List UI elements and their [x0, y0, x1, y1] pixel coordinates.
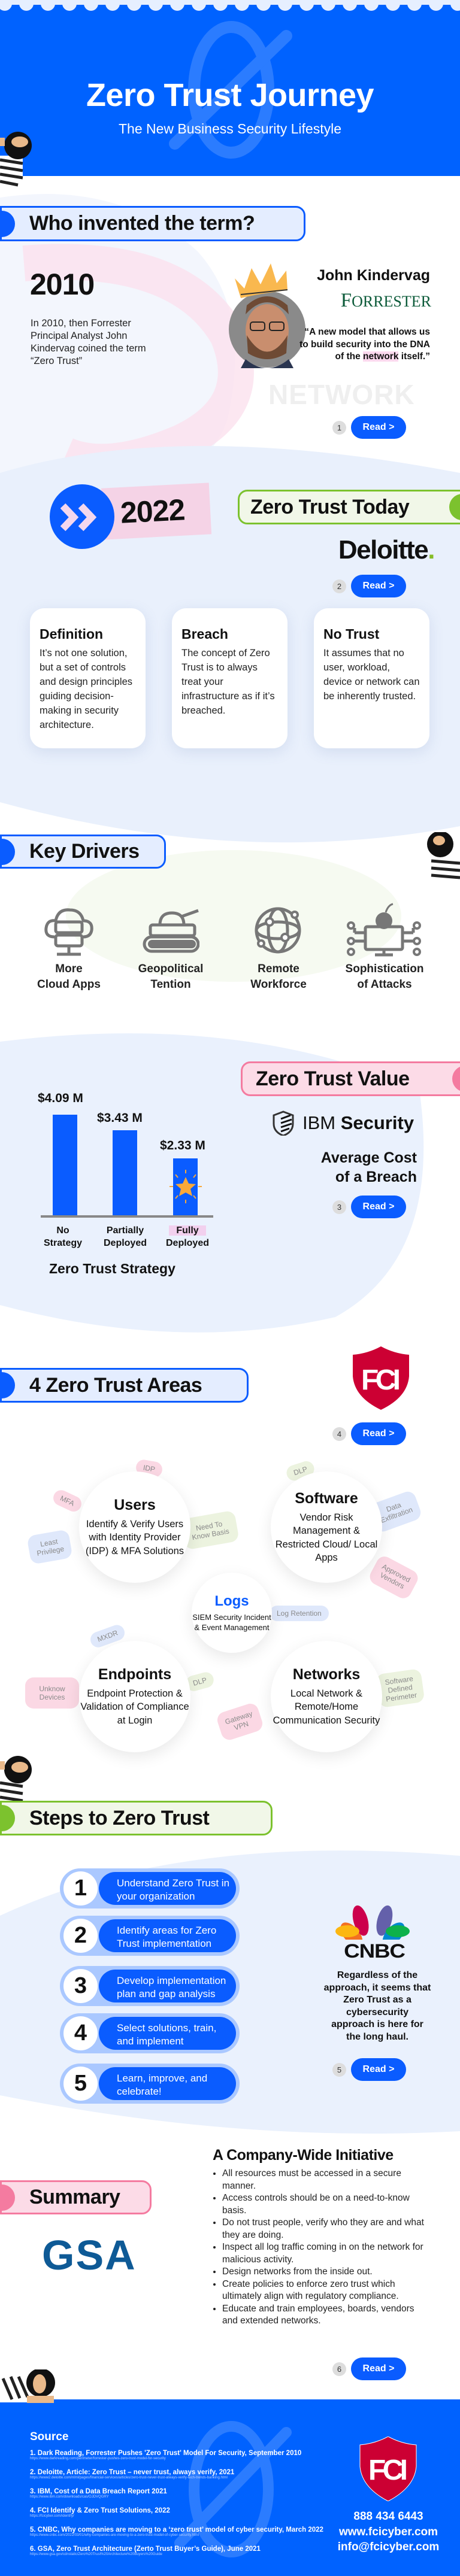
circle: networks [271, 1641, 382, 1752]
step 4: 4 [74, 2020, 87, 2046]
driver labels [37, 963, 101, 991]
icon: cloud apps [44, 908, 93, 955]
zero trust areas diagram: Software [385, 1674, 414, 1686]
circle: endpoints: Endpoints [98, 1666, 171, 1683]
card: definition: Definition [40, 626, 103, 642]
contact [338, 2510, 439, 2553]
icon: bomb computer [347, 903, 421, 957]
read 4: 4 [337, 1430, 341, 1438]
read 4 [332, 1422, 406, 1445]
text: average cost: of a Breach [335, 1169, 417, 1185]
card: no trust: It assumes that no user, workload, device or network can be inherently trusted. [323, 648, 419, 702]
zero trust areas diagram [25, 1460, 424, 1759]
chart title: Zero Trust Strategy [49, 1261, 175, 1276]
zero trust areas diagram: MXDR [96, 1628, 119, 1644]
heading: 4 zero trust areas [0, 1368, 249, 1403]
subtitle: The New Business Security Lifestyle [119, 121, 341, 136]
read 2 [332, 575, 406, 597]
zero trust areas diagram: DLP [192, 1676, 208, 1688]
driver labels: More [55, 963, 83, 975]
step 4 [60, 2013, 240, 2053]
heading: who invented: Who invented the term? [29, 212, 255, 235]
bar chart [38, 1091, 213, 1248]
text: company-wide initiative: Educate and train employees, boards, vendors and extended networks. [222, 2304, 414, 2326]
read 5 [332, 2058, 406, 2081]
bar chart: $2.33 M [160, 1139, 205, 1152]
read 3 [332, 1196, 406, 1218]
contact: www.fcicyber.com [339, 2525, 438, 2538]
sources: 3. IBM, Cost of a Data Breach Report 2021 [30, 2488, 167, 2495]
tags: IDP [143, 1463, 156, 1474]
photo: John Kindervag with crown [229, 263, 305, 368]
circle: logs [192, 1573, 272, 1653]
sources: 4. FCI Identify & Zero Trust Solutions, 2022 [30, 2507, 170, 2514]
text: 2010 paragraph: In 2010, then Forrester Principal Analyst John Kindervag coined the term “Zero Trust” [31, 318, 146, 366]
heading: steps to zero trust [0, 1801, 273, 1835]
read 5: 5 [337, 2065, 341, 2074]
step 1: Understand Zero Trust in your organization [117, 1877, 229, 1901]
zero trust areas diagram: DLP [292, 1465, 308, 1477]
zero trust areas diagram: Exfiltration [379, 1505, 414, 1525]
step 2 [60, 1916, 240, 1956]
card: no trust: No Trust [323, 626, 379, 642]
read 5: Read > [363, 2064, 394, 2074]
heading: key drivers: Key Drivers [29, 840, 140, 863]
zero trust areas diagram: MFA [59, 1494, 75, 1508]
read 6: Read > [363, 2363, 394, 2374]
year 2022 badge: 2022 [120, 493, 186, 530]
step 2: Identify areas for Zero Trust implementation [117, 1924, 216, 1949]
zero trust areas diagram: Gateway [224, 1709, 253, 1726]
step 1 [60, 1868, 240, 1909]
icon: globe network [255, 908, 301, 953]
logo: Deloitte: Deloitte. [338, 535, 434, 565]
year 2022 badge [50, 483, 211, 549]
step 3: Develop implementation plan and gap analysis [117, 1974, 226, 1999]
name: John Kindervag [317, 267, 430, 284]
text: cnbc quote: Regardless of the approach, it seems that Zero Trust as a cybersecurity approach is here for the long haul. [324, 1970, 431, 2041]
logo: IBM Security [273, 1110, 414, 1136]
logo: Forrester: FORRESTER [341, 290, 431, 311]
text: company-wide initiative: Create policies to enforce zero trust which ultimately align with regulatory compliance. [222, 2278, 399, 2301]
text: Tention [150, 978, 191, 991]
icon: thief 1 [0, 132, 32, 187]
read 3: 3 [337, 1202, 341, 1212]
zero trust areas diagram: VPN [233, 1719, 250, 1732]
heading: zero trust today [238, 490, 460, 524]
circle: endpoints: Endpoint Protection & Validation of Compliance at Login [80, 1688, 189, 1726]
zero trust areas diagram: Log Retention [277, 1609, 322, 1618]
bar chart: Strategy [44, 1238, 82, 1248]
text: company-wide initiative: Do not trust people, verify who they are and what they are doing. [222, 2217, 424, 2240]
icon: tank [143, 909, 199, 953]
circle: networks: Networks [293, 1666, 360, 1683]
icon: thief 4 [0, 2369, 55, 2403]
sources: 5. CNBC, Why companies are moving to a ‘zero trust’ model of cyber security, March 2022 [30, 2526, 323, 2533]
zero trust areas diagram: Need To [195, 1519, 223, 1533]
heading: zero trust today: Zero Trust Today [250, 496, 409, 518]
zero trust areas diagram: Know Basis [191, 1527, 230, 1542]
zero trust areas diagram: Data [385, 1501, 402, 1513]
text: Sophistication [346, 963, 423, 975]
read 2: Read > [363, 581, 394, 591]
zero trust areas diagram: Vendors [379, 1571, 406, 1591]
logo: CNBC [335, 1905, 410, 1962]
circle: users [79, 1471, 190, 1583]
read 3: Read > [363, 1201, 394, 1212]
zero trust areas diagram: Devices [40, 1693, 65, 1701]
sources: 6. GSA, Zero Trust Architecture (Zerto Trust Buyer’s Guide), June 2021 [30, 2545, 261, 2553]
bar chart: Deployed [104, 1238, 147, 1248]
icon: thief 3 [0, 1756, 32, 1801]
step 5 [60, 2064, 240, 2104]
card: breach: Breach [181, 626, 228, 642]
contact: 888 434 6443 [353, 2510, 423, 2523]
quote: “A new model that allows us to build security into the DNA of the network itself.” [299, 327, 430, 362]
read 6: 6 [337, 2365, 341, 2373]
step 4: Select solutions, train, and implement [117, 2022, 216, 2046]
NETWORK watermark: NETWORK [268, 379, 415, 410]
sources [30, 2431, 323, 2556]
sources: https://www.gsa.gov/cdnstatic/Zero%20Trust%20Architecture%20Buyers%20Guide [30, 2553, 162, 2556]
driver labels: Cloud Apps [37, 978, 101, 991]
step 5: Learn, improve, and celebrate! [117, 2073, 207, 2096]
logo: IBM Security: IBM Security [302, 1112, 414, 1133]
read 1: Read > [363, 422, 394, 432]
step 3 [60, 1966, 240, 2006]
step 1: 1 [74, 1876, 87, 1901]
circle: software: Software [295, 1489, 358, 1506]
card: breach [172, 608, 288, 748]
tags [135, 1458, 164, 1479]
contact: info@fcicyber.com [338, 2541, 439, 2553]
text: company-wide initiative: Inspect all log traffic coming in on the network for malicious activity. [222, 2242, 423, 2264]
text: company-wide initiative: Access controls should be on a need-to-know basis. [222, 2193, 410, 2215]
read 1: 1 [337, 423, 341, 432]
logo: FCI footer [359, 2437, 417, 2501]
bar chart: Fully [176, 1225, 199, 1236]
sources: 2. Deloitte, Article: Zero Trust – never trust, always verify, 2021 [30, 2469, 234, 2476]
circle: logs: Logs [214, 1593, 249, 1609]
sources: https://www2.deloitte.com/nl/nl/pages/financial-services/articles/zero-trust-never-trust-always-verify-tech-trends-banking.html [30, 2476, 228, 2480]
bar chart: $3.43 M [97, 1111, 143, 1125]
circle: users: Identify & Verify Users with Identity Provider (IDP) & MFA Solutions [86, 1519, 184, 1556]
sources: https://www.darkreading.com/perimeter/forrester-pushes-zero-trust-model-for-security [30, 2457, 166, 2460]
zero trust areas diagram: Least [40, 1537, 58, 1549]
text: company-wide initiative [213, 2147, 424, 2326]
sources: 1. Dark Reading, Forrester Pushes 'Zero Trust' Model For Security, September 2010 [30, 2450, 301, 2457]
zero trust areas diagram: Approved [380, 1562, 411, 1584]
bar chart: $4.09 M [38, 1091, 83, 1105]
text: of Attacks [357, 978, 412, 991]
heading: summary [0, 2180, 152, 2214]
zero trust areas diagram: Perimeter [385, 1691, 417, 1703]
step 3: 3 [74, 1973, 87, 1998]
text: average cost [321, 1149, 417, 1185]
text: company-wide initiative: All resources must be accessed in a secure manner. [222, 2168, 401, 2191]
sources: Source [30, 2431, 68, 2443]
circle: endpoints [79, 1641, 190, 1752]
text: company-wide initiative: A Company-Wide Initiative [213, 2147, 394, 2164]
card: breach: The concept of Zero Trust is to always treat your infrastructure as if it’s breached. [181, 648, 275, 716]
heading: summary: Summary [29, 2186, 120, 2208]
circle: users: Users [114, 1497, 156, 1513]
header [0, 0, 460, 176]
zero trust areas diagram: Defined [388, 1683, 413, 1695]
heading: 4 zero trust areas: 4 Zero Trust Areas [29, 1373, 202, 1396]
sources: https://fcicyber.com/identify/ [30, 2514, 74, 2518]
read 2: 2 [337, 582, 341, 590]
year 2010: 2010 [30, 268, 94, 301]
logo: GSA: GSA [42, 2232, 137, 2278]
footer [0, 2399, 460, 2576]
circle: software: Vendor Risk Management & Restricted Cloud/ Local Apps [276, 1512, 377, 1563]
text: company-wide initiative: Design networks from the inside out. [222, 2266, 373, 2277]
logo: CNBC: CNBC [344, 1940, 405, 1962]
card: definition: It’s not one solution, but a set of controls and design principles guiding decision-making in security architecture. [40, 648, 132, 730]
text: average cost: Average Cost [321, 1149, 417, 1166]
text: Workforce [250, 978, 307, 991]
sources: https://www.cnbc.com/2022/03/01/why-companies-are-moving-to-a-zero-trust-model-of-cyber-security.html [30, 2533, 199, 2537]
zero trust areas diagram: Unknow [39, 1685, 65, 1693]
text: Remote [258, 963, 299, 975]
read 1 [332, 416, 406, 439]
icon: thief 2 [427, 832, 460, 879]
read 6 [332, 2357, 406, 2380]
step 2: 2 [74, 1923, 87, 1948]
zero trust areas diagram: Privilege [36, 1545, 65, 1558]
logo: FCI shield [353, 1346, 409, 1410]
card: no trust [314, 608, 429, 748]
heading: zero trust value [241, 1061, 460, 1096]
heading: who invented [0, 206, 305, 241]
logo: FCI shield: FCI [361, 1364, 401, 1396]
logo: FCI footer: FCI [368, 2454, 408, 2486]
step 5: 5 [74, 2071, 87, 2096]
heading: key drivers [0, 835, 166, 869]
read 4: Read > [363, 1428, 394, 1439]
circle: networks: Local Network & Remote/Home Communication Security [273, 1688, 380, 1726]
bar chart: No [56, 1225, 69, 1236]
steps list [60, 1868, 240, 2104]
sources: https://www.ibm.com/downloads/cas/OJDVQGRY [30, 2495, 109, 2499]
circle: software [271, 1471, 382, 1583]
text: Geopolitical [138, 963, 203, 975]
heading: zero trust value: Zero Trust Value [256, 1067, 410, 1090]
heading: steps to zero trust: Steps to Zero Trust [29, 1807, 209, 1829]
bar chart: Deployed [166, 1238, 209, 1248]
circle: logs: SIEM Security Incident & Event Management [192, 1613, 271, 1632]
bar chart: Partially [107, 1225, 144, 1236]
card: definition [30, 608, 146, 748]
title: Zero Trust Journey [86, 77, 374, 113]
